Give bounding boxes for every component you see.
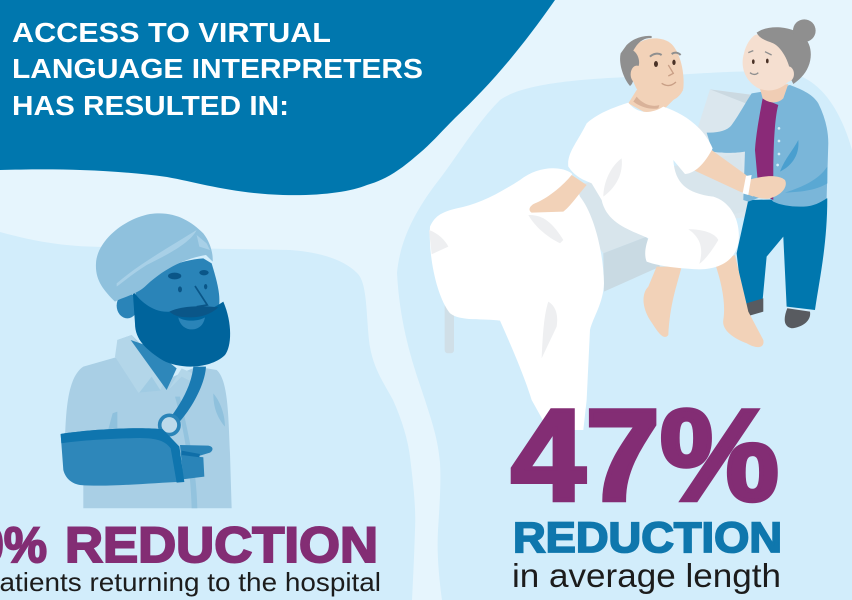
clasped hands bbox=[748, 176, 786, 199]
gown shadow folds bbox=[429, 158, 718, 358]
sling ring bbox=[160, 415, 179, 435]
man: eyes and smile bbox=[654, 60, 676, 67]
illustration: elderly patient and woman beside bed bbox=[429, 19, 828, 430]
sling bbox=[61, 428, 184, 486]
face bbox=[135, 258, 219, 333]
right stat description: in average length bbox=[512, 557, 781, 594]
title: LANGUAGE INTERPRETERS bbox=[12, 53, 423, 84]
man: hair bbox=[620, 36, 652, 86]
stat: left percentage bbox=[0, 517, 378, 573]
moustache bbox=[169, 306, 218, 317]
ear bbox=[117, 293, 138, 318]
mouth bbox=[178, 317, 205, 329]
placket bbox=[175, 397, 197, 508]
header banner bbox=[0, 0, 555, 195]
shirt bbox=[65, 335, 232, 508]
man: head bbox=[628, 38, 684, 103]
cardigan buttons bbox=[776, 127, 780, 166]
man: left arm bbox=[530, 175, 587, 213]
blanket bbox=[430, 168, 604, 430]
woman: cardigan bbox=[707, 85, 828, 207]
title bbox=[12, 17, 423, 121]
hand bbox=[180, 445, 213, 479]
woman: purple shirt bbox=[755, 98, 778, 200]
neck bbox=[131, 340, 177, 390]
panel: left background blob bbox=[0, 232, 415, 600]
title: ACCESS TO VIRTUAL bbox=[12, 17, 331, 48]
pillow bbox=[697, 89, 753, 223]
mattress bbox=[567, 153, 750, 253]
man: feet and legs bbox=[644, 267, 682, 337]
cardigan fold bbox=[780, 140, 798, 172]
panel: right background blob bbox=[397, 71, 852, 600]
wristband bbox=[743, 175, 752, 195]
woman: eyes bbox=[752, 59, 769, 64]
collar bbox=[115, 335, 193, 393]
left stat heading: REDUCTION bbox=[65, 517, 378, 573]
title: HAS RESULTED IN: bbox=[12, 90, 289, 121]
man: neck bbox=[628, 90, 683, 113]
bed leg bbox=[445, 303, 454, 353]
woman: shoes bbox=[747, 298, 810, 328]
beard bbox=[133, 290, 230, 367]
man: right arm bbox=[693, 150, 753, 197]
gown bbox=[568, 103, 739, 269]
sling strap bbox=[171, 367, 206, 424]
eyes, brows, nose bbox=[168, 270, 209, 292]
turban bbox=[96, 213, 213, 302]
woman: trousers bbox=[737, 198, 827, 310]
woman: neck and face bbox=[760, 84, 788, 102]
right stat heading: REDUCTION bbox=[513, 514, 782, 562]
illustration: man with turban and arm sling bbox=[61, 213, 232, 508]
woman: hair and bun bbox=[757, 27, 811, 84]
stat: 47 percent: 47% bbox=[511, 382, 779, 528]
